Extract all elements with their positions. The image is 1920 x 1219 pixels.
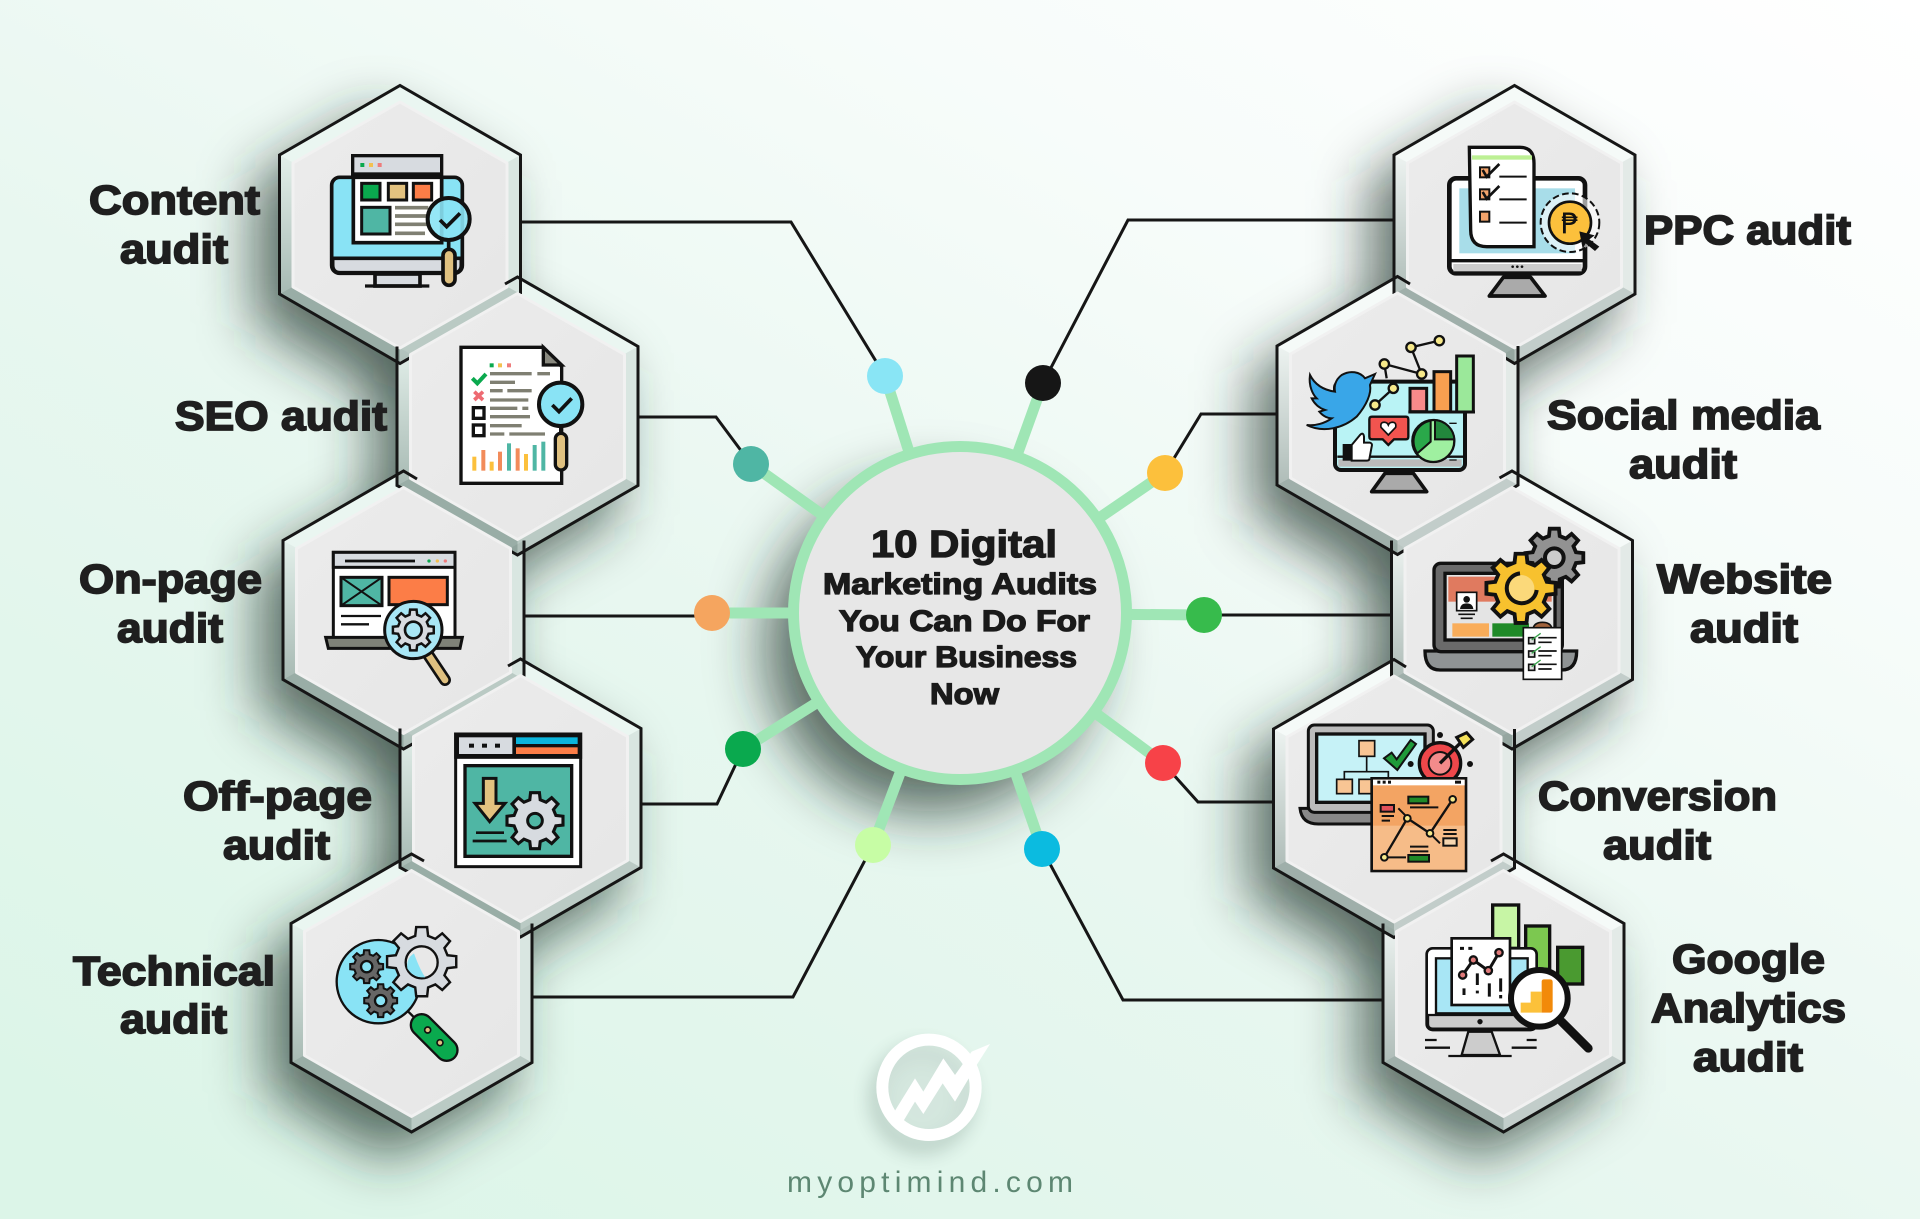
label: SEO audit: SEO audit bbox=[175, 393, 387, 439]
title text: 10 Digital bbox=[871, 524, 1057, 566]
label: Social media audit bbox=[1547, 392, 1821, 487]
panel: Content audit bbox=[89, 86, 520, 364]
connector lines bbox=[521, 220, 1394, 1000]
label: Google Analytics audit: audit bbox=[1693, 1034, 1803, 1080]
title text: Your Business bbox=[856, 641, 1077, 674]
title text: You Can Do For bbox=[839, 605, 1090, 638]
label: Website audit bbox=[1657, 556, 1832, 651]
label: On-page audit: audit bbox=[117, 605, 223, 651]
icon: monitor with checklist and peso coin: ₱ bbox=[1561, 206, 1579, 240]
logo shadow bbox=[875, 1050, 969, 1148]
label: Google Analytics audit bbox=[1651, 936, 1846, 1080]
panel: Website audit bbox=[1392, 471, 1832, 749]
drop shadows bbox=[256, 113, 1612, 1160]
panel: SEO audit bbox=[175, 277, 638, 555]
website text: myoptimind.com bbox=[787, 1166, 1073, 1199]
label: Conversion audit: Conversion bbox=[1538, 773, 1777, 819]
label: Off-page audit: Off-page bbox=[183, 773, 372, 819]
icon: window with download arrow and gear bbox=[456, 734, 581, 867]
label: On-page audit bbox=[79, 556, 262, 651]
icon: laptop with gears and clipboard bbox=[1425, 529, 1583, 679]
panel: PPC audit bbox=[1394, 86, 1851, 364]
label: Off-page audit bbox=[183, 773, 372, 868]
label: Google Analytics audit: Analytics bbox=[1651, 985, 1846, 1031]
panel: Social media audit bbox=[1277, 276, 1821, 554]
icon: social media monitor with bird, charts and network bbox=[1307, 336, 1475, 492]
hexagon bevel bases bbox=[280, 86, 1635, 1132]
label: Website audit: audit bbox=[1690, 605, 1798, 651]
label: Technical audit: audit bbox=[120, 996, 227, 1042]
icon: SEO report with magnifier bbox=[461, 347, 582, 483]
logo: myoptimind mark bbox=[882, 1040, 990, 1135]
spokes bbox=[712, 376, 1204, 849]
label: Google Analytics audit: Google bbox=[1672, 936, 1825, 982]
panel: Technical audit bbox=[73, 854, 532, 1132]
label: Off-page audit: audit bbox=[223, 822, 330, 868]
icon: monitor with checklist and peso coin bbox=[1449, 147, 1599, 296]
icon: analytics monitor with magnifier bbox=[1425, 905, 1588, 1056]
label: Conversion audit bbox=[1538, 773, 1777, 868]
label: On-page audit: On-page bbox=[79, 556, 262, 602]
panel: Off-page audit bbox=[183, 659, 641, 937]
icon: gears under magnifier bbox=[337, 927, 456, 1050]
title text: Now bbox=[930, 678, 1000, 711]
title text bbox=[823, 524, 1097, 711]
icon: laptop with flowchart, target and conversion chart bbox=[1300, 725, 1473, 871]
label: Technical audit: Technical bbox=[73, 948, 275, 994]
icon: browser window with gear magnifier bbox=[326, 552, 462, 680]
label: Content audit: audit bbox=[120, 226, 228, 272]
label: Content audit: Content bbox=[89, 177, 260, 223]
title text: Marketing Audits bbox=[823, 568, 1097, 601]
label: Website audit: Website bbox=[1657, 556, 1832, 602]
panel: Google Analytics audit bbox=[1383, 854, 1846, 1132]
label: Social media audit: Social media bbox=[1547, 392, 1821, 438]
label: Technical audit bbox=[73, 948, 275, 1042]
central title circle bbox=[794, 446, 1126, 780]
panel: On-page audit bbox=[79, 471, 524, 749]
label: Content audit bbox=[89, 177, 260, 272]
panel: Conversion audit bbox=[1274, 660, 1777, 938]
spoke end dots bbox=[694, 358, 1222, 867]
label: PPC audit: PPC audit bbox=[1644, 207, 1851, 253]
label: Conversion audit: audit bbox=[1603, 822, 1711, 868]
label: Social media audit: audit bbox=[1629, 441, 1737, 487]
icon: content monitor with magnifier bbox=[332, 156, 470, 286]
